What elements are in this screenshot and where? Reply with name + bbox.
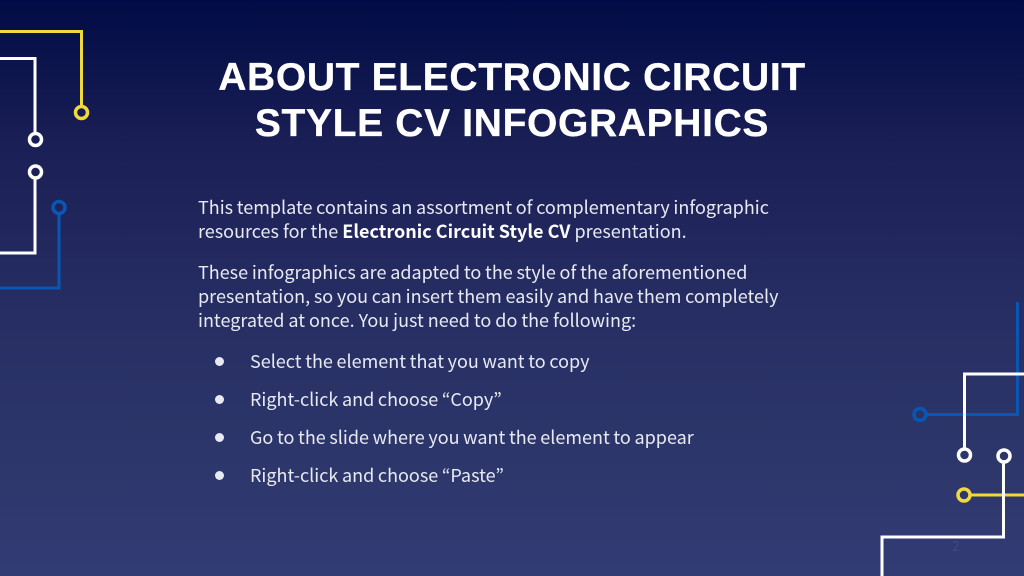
intro paragraph: resources for the Electronic Circuit Style CV presentation.	[198, 218, 687, 244]
title	[218, 56, 806, 145]
step 3: Go to the slide where you want the element to appear	[250, 424, 694, 450]
step 4: Right-click and choose “Paste”	[250, 462, 504, 488]
circuit: white right upper	[958, 374, 1024, 461]
circuit: white right lower	[882, 450, 1010, 576]
circuit: white upper left	[0, 58, 42, 146]
step 1: Select the element that you want to copy	[250, 348, 589, 374]
intro paragraph	[198, 194, 769, 244]
second paragraph	[198, 259, 778, 333]
circuit: blue right	[914, 302, 1018, 420]
second paragraph: These infographics are adapted to the style of the aforementioned	[198, 259, 747, 285]
circuit: white lower left	[0, 166, 42, 253]
title: ABOUT ELECTRONIC CIRCUIT	[218, 56, 806, 99]
bullet list	[215, 348, 694, 488]
circuit: yellow right	[958, 489, 1024, 501]
second paragraph: presentation, so you can insert them easily and have them completely	[198, 283, 778, 309]
circuit: yellow top left	[0, 32, 88, 118]
second paragraph: integrated at once. You just need to do the following:	[198, 307, 636, 333]
step 2: Right-click and choose “Copy”	[250, 386, 502, 412]
circuit: blue left	[0, 202, 65, 288]
page number: 2	[952, 536, 960, 556]
intro paragraph: This template contains an assortment of complementary infographic	[198, 194, 769, 220]
title: STYLE CV INFOGRAPHICS	[255, 102, 769, 145]
